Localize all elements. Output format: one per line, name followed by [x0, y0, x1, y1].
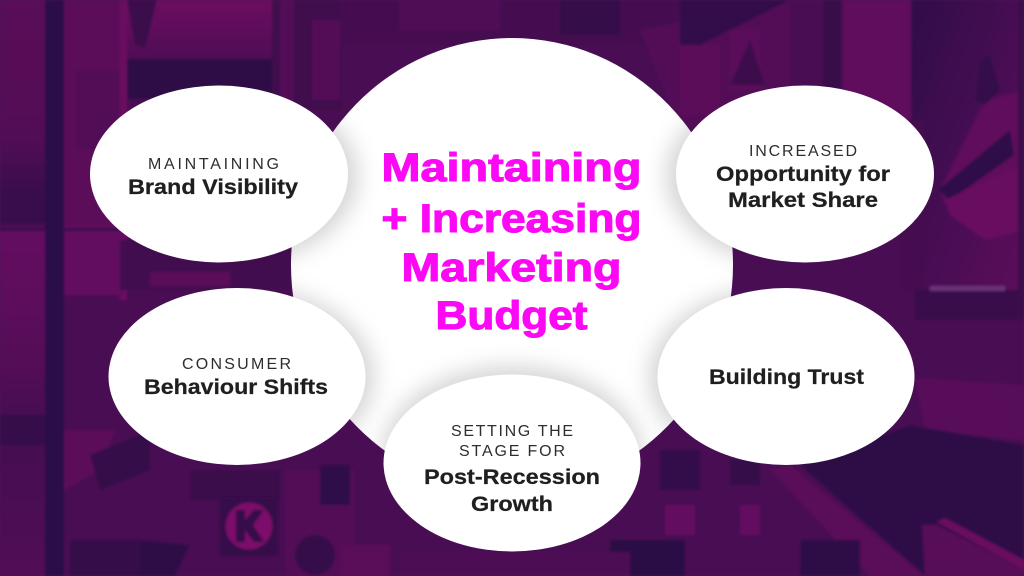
- label: Post-Recession Growth: Post-Recession: [424, 465, 600, 489]
- panel: Consumer Behaviour Shifts: [108, 288, 366, 465]
- panel: Increased Opportunity for Market Share: [676, 86, 934, 262]
- panel: Setting the Stage for Post-Recession Growth: [384, 374, 640, 552]
- ellipse shadows on the central shape: [291, 120, 733, 450]
- label: Building Trust: Building Trust: [709, 365, 864, 389]
- label: Setting the Stage for: SETTING THE: [451, 423, 573, 440]
- label: Opportunity for Market Share: [716, 162, 891, 212]
- label: Brand Visibility: Brand Visibility: [128, 175, 298, 199]
- panel: Maintaining Brand Visibility: [90, 86, 348, 262]
- label: Opportunity for Market Share: Opportunity for: [716, 162, 891, 186]
- label: Behaviour Shifts: Behaviour Shifts: [144, 375, 328, 399]
- panel: Building Trust: [658, 288, 914, 465]
- heading: Maintaining + Increasing Marketing Budget: Marketing: [402, 246, 622, 290]
- label: Opportunity for Market Share: Market Share: [728, 188, 878, 212]
- label: Consumer: CONSUMER: [182, 356, 291, 373]
- label: Setting the Stage for: STAGE FOR: [459, 443, 565, 460]
- heading: Maintaining + Increasing Marketing Budget: Maintaining: [382, 146, 642, 190]
- heading: Maintaining + Increasing Marketing Budget: Budget: [436, 294, 588, 338]
- label: Increased: INCREASED: [749, 143, 857, 160]
- central ellipse: [291, 38, 733, 451]
- label: Maintaining: MAINTAINING: [148, 156, 279, 173]
- heading: Maintaining + Increasing Marketing Budget: + Increasing: [382, 197, 642, 241]
- label: Setting the Stage for: [451, 423, 573, 460]
- label: Post-Recession Growth: Growth: [471, 492, 553, 516]
- icon: Circle K store sign: [220, 497, 278, 556]
- label: Post-Recession Growth: [424, 465, 600, 516]
- heading: Maintaining + Increasing Marketing Budget: [382, 146, 642, 338]
